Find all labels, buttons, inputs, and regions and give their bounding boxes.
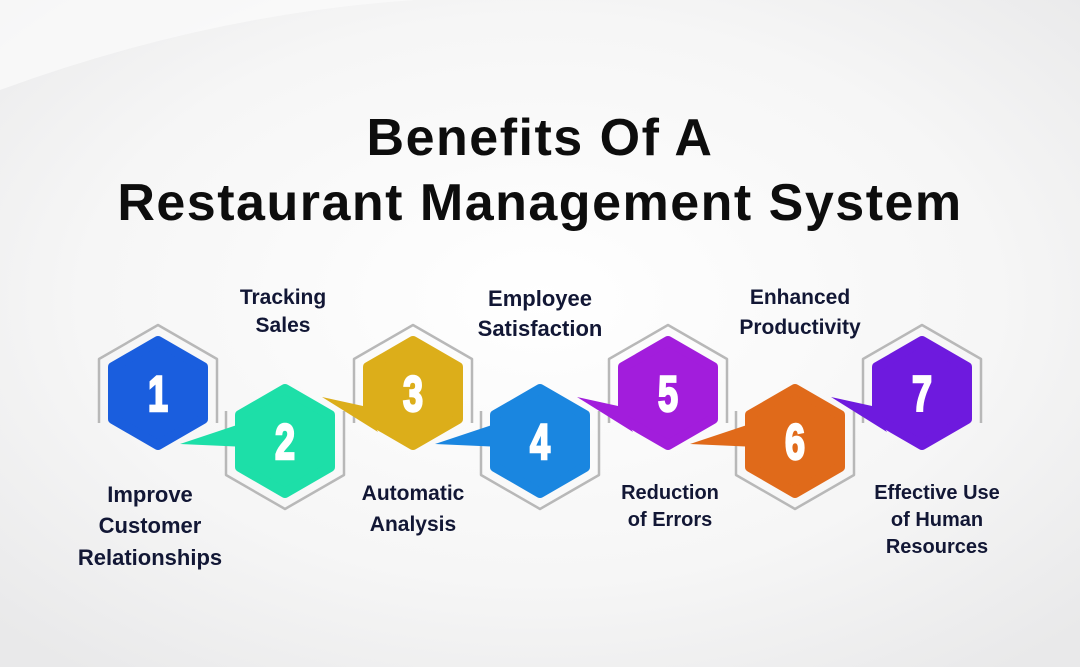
label: enhanced productivity: Productivity — [739, 316, 861, 339]
title: Restaurant Management System — [117, 174, 963, 232]
hexagon 6: 6 — [785, 415, 805, 470]
title: Benefits Of A — [367, 109, 713, 167]
label: reduction of errors — [621, 482, 719, 531]
hexagon 1: 1 — [148, 367, 168, 422]
hexagon 2: 2 — [275, 415, 295, 470]
label: tracking sales: Tracking — [240, 286, 326, 309]
label: automatic analysis: Automatic — [362, 482, 465, 505]
label: employee satisfaction: Employee — [488, 286, 592, 311]
label: effective use of human resources: Resources — [886, 536, 988, 558]
label: effective use of human resources: Effective Use — [874, 482, 1000, 504]
label: employee satisfaction — [478, 286, 602, 341]
hexagon 4 — [435, 389, 599, 509]
title — [117, 109, 963, 232]
label: enhanced productivity: Enhanced — [750, 286, 850, 309]
label: reduction of errors: of Errors — [628, 509, 712, 531]
hexagon 1 — [99, 325, 217, 445]
label: effective use of human resources — [874, 482, 1000, 558]
hexagon 2 — [180, 389, 344, 509]
label: employee satisfaction: Satisfaction — [478, 316, 602, 341]
hexagon 7: 7 — [912, 367, 932, 422]
label: reduction of errors: Reduction — [621, 482, 719, 504]
hexagon 4: 4 — [530, 415, 550, 470]
label: enhanced productivity — [739, 286, 861, 339]
label: improve customer relationships — [78, 482, 222, 570]
hexagon 5: 5 — [658, 367, 678, 422]
hexagon 7 — [831, 325, 981, 445]
hexagon 5 — [577, 325, 727, 445]
hexagon 3 — [322, 325, 472, 445]
label: automatic analysis: Analysis — [370, 513, 456, 536]
label: effective use of human resources: of Human — [891, 509, 983, 531]
label: improve customer relationships: Improve — [107, 482, 193, 507]
label: improve customer relationships: Relationships — [78, 545, 222, 570]
label: tracking sales — [240, 286, 326, 337]
label: improve customer relationships: Customer — [99, 513, 202, 538]
hexagon 3: 3 — [403, 367, 423, 422]
label: tracking sales: Sales — [256, 314, 310, 337]
label: automatic analysis — [362, 482, 465, 536]
hexagon 6 — [690, 389, 854, 509]
